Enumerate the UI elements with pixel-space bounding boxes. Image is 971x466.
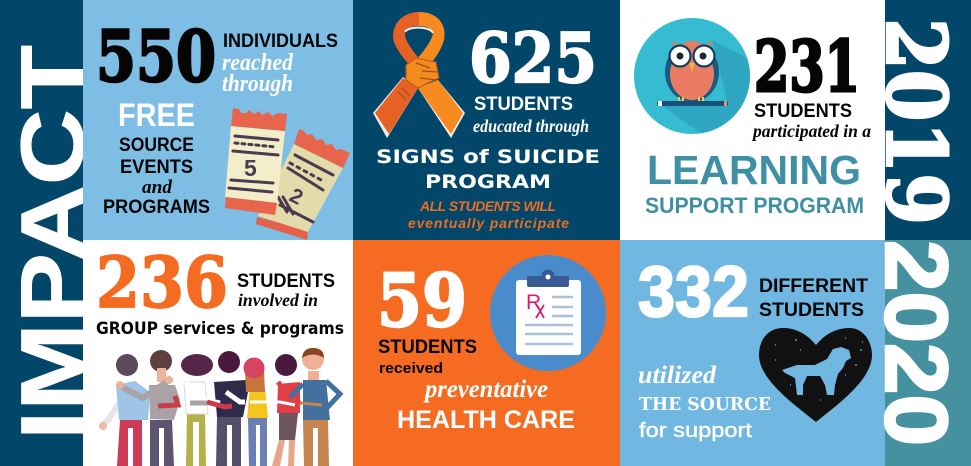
label: and: and xyxy=(142,177,172,198)
label: students: STUDENTS xyxy=(378,337,477,358)
label: individuals: INDIVIDUALS xyxy=(223,31,338,52)
icon: tickets: 2 xyxy=(286,184,307,210)
stat: 59: 59 xyxy=(377,258,467,344)
label: for support: for support xyxy=(639,420,753,442)
icon: orange ribbon with clasped hands xyxy=(373,12,465,138)
side band: IMPACT: IMPACT xyxy=(2,45,102,440)
panel: 231 students xyxy=(634,18,871,213)
panel: 236 students xyxy=(83,240,353,466)
illustration: group of seven students xyxy=(99,348,340,466)
heading: free: FREE xyxy=(118,97,195,133)
stat: 625: 625 xyxy=(469,19,597,99)
panel: 550 individuals xyxy=(83,0,353,240)
label: participated in a: participated in a xyxy=(751,121,871,141)
stat: 236: 236 xyxy=(96,241,228,324)
icon: heart with dog silhouette xyxy=(759,328,872,422)
heading: the source: THE SOURCE xyxy=(639,394,771,415)
panel: 332 students xyxy=(620,240,885,466)
label: programs: PROGRAMS xyxy=(103,197,210,218)
icon: owl on a pencil xyxy=(634,18,755,140)
label: events: EVENTS xyxy=(120,157,193,178)
stat: 332: 332 xyxy=(638,253,749,332)
side band: 2019: 2019 xyxy=(867,18,963,225)
note: all students will: ALL STUDENTS WILL xyxy=(419,198,556,214)
icon: prescription clipboard xyxy=(490,255,606,371)
heading: learning: LEARNING xyxy=(647,147,861,193)
icon: tickets xyxy=(225,108,350,240)
heading: signs of suicide: SIGNS of SUICIDE xyxy=(376,146,600,168)
label: students: STUDENTS xyxy=(759,300,864,321)
label: reached: reached xyxy=(222,50,294,76)
label: received: received xyxy=(379,360,443,377)
panel: 59 students xyxy=(353,240,620,466)
label: students: STUDENTS xyxy=(754,101,852,122)
heading: health care: HEALTH CARE xyxy=(397,406,575,434)
icon: prescription clipboard: R xyxy=(526,291,541,314)
note: eventually participate: eventually participate xyxy=(408,215,569,231)
label: educated through: educated through xyxy=(473,116,589,136)
stat: 550: 550 xyxy=(96,15,216,98)
panel: 625 students xyxy=(353,0,620,240)
heading: program: PROGRAM xyxy=(425,171,551,193)
label: preventative: preventative xyxy=(423,376,548,403)
label: through: through xyxy=(222,71,293,97)
label: students: STUDENTS xyxy=(474,94,573,115)
heading: support program: SUPPORT PROGRAM xyxy=(645,193,864,218)
label: involved in: involved in xyxy=(238,290,318,310)
label: students: STUDENTS xyxy=(237,271,335,292)
heading: group services and programs: GROUP services & programs xyxy=(96,319,344,339)
side band: 2020: 2020 xyxy=(867,240,966,446)
label: utilized: utilized xyxy=(638,362,717,389)
label: source: SOURCE xyxy=(119,135,194,156)
stat: 231: 231 xyxy=(754,25,860,108)
label: different: DIFFERENT xyxy=(759,276,868,297)
icon: tickets: 5 xyxy=(244,155,257,181)
